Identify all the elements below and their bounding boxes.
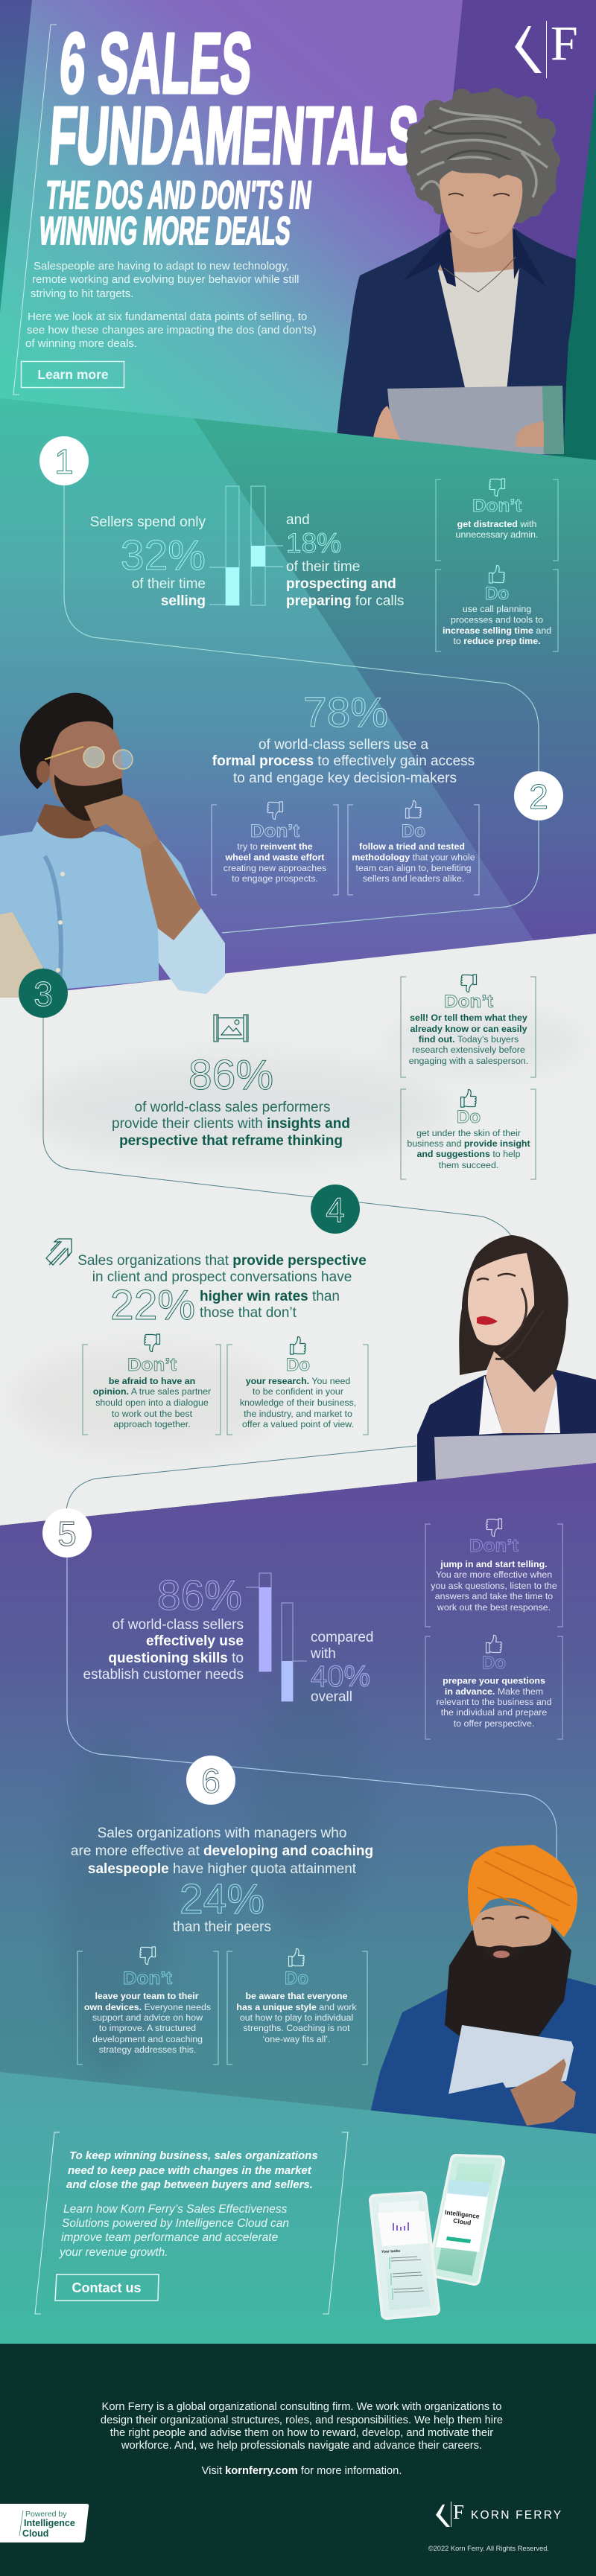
stat 5 right: overall — [311, 1689, 352, 1705]
panel: 4 do: Do — [286, 1355, 310, 1375]
panel: 1 don't: Don’t — [472, 496, 522, 516]
panel: 5 don't: You are more effective when — [436, 1569, 552, 1580]
call to action statement: need to keep pace with changes in the market — [68, 2164, 312, 2177]
icon: thumb up — [405, 800, 421, 818]
panel: 3 do — [401, 1089, 536, 1179]
stat 1 left: selling — [161, 593, 206, 609]
stat 5 left: of world-class sellers — [112, 1617, 244, 1633]
panel: 2 do: team can align to, benefiting — [356, 863, 472, 873]
stat 5 left — [83, 1572, 244, 1683]
panel: 2 do: follow a tried and tested — [359, 841, 465, 852]
phone: login screen: Intelligence — [445, 2208, 480, 2220]
stat 4: higher win rates than — [200, 1289, 340, 1304]
number 4: 4 — [326, 1190, 345, 1229]
panel: 6 don't: own devices. Everyone needs — [84, 2002, 211, 2012]
panel: 6 do: ‘one-way fits all’. — [263, 2034, 330, 2044]
panel: 4 don't: should open into a dialogue — [95, 1397, 209, 1408]
stat 5 left: establish customer needs — [83, 1667, 244, 1683]
panel: 6 do: strengths. Coaching is not — [243, 2023, 350, 2033]
call to action text: improve team performance and accelerate — [61, 2231, 279, 2244]
stat 3: 86% — [188, 1051, 273, 1099]
section background: call to action — [0, 2072, 596, 2344]
icon: thumb up — [489, 565, 504, 583]
panel: 3 do: Do — [457, 1107, 481, 1127]
panel: 3 do: and suggestions to help — [416, 1149, 521, 1159]
connector line 5-6 — [67, 1556, 557, 1861]
panel: 5 do: in advance. Make them — [445, 1686, 543, 1697]
intro text: remote working and evolving buyer behavior while still — [32, 273, 299, 286]
subtitle: WINNING MORE DEALS — [37, 209, 293, 253]
panel: 4 do: offer a valued point of view. — [242, 1419, 354, 1429]
stat 24%: 24% — [180, 1875, 264, 1923]
stat 5 right — [310, 1630, 374, 1705]
panel: 4 don't: opinion. A true sales partner — [93, 1386, 211, 1397]
title: 6 SALES — [57, 16, 255, 111]
section background: stats 1 and 2 — [0, 398, 596, 1001]
number 5 — [42, 1508, 92, 1558]
subtitle: THE DOS AND DON'TS IN — [44, 173, 314, 217]
panel: 6 don't — [77, 1947, 218, 2065]
stat 22%: 22% — [110, 1281, 195, 1329]
intro text: of winning more deals. — [25, 337, 137, 350]
hero frame bracket — [13, 25, 57, 395]
icon: thumb up — [460, 1089, 476, 1107]
stat 5 left: 86% — [157, 1572, 242, 1619]
call to action statement: To keep winning business, sales organizations — [69, 2149, 318, 2162]
stat 4: those that don’t — [200, 1305, 297, 1321]
icon: scroll with landscape — [214, 1015, 248, 1042]
panel: 6 don't: Don’t — [123, 1968, 172, 1989]
intro text — [25, 260, 317, 350]
photo: woman with laptop — [417, 1235, 596, 1482]
panel: 6 do: Do — [285, 1968, 308, 1989]
panel: 6 do — [227, 1948, 367, 2065]
intro text: Salespeople are having to adapt to new technology, — [34, 260, 289, 272]
phone: tasks screen: Your tasks — [381, 2249, 400, 2254]
stat 5 right: compared — [311, 1630, 374, 1645]
stat 2: 78% — [303, 689, 388, 736]
number 1: 1 — [54, 442, 74, 481]
icon: thumb up — [291, 1336, 305, 1354]
panel: 2 do: sellers and leaders alike. — [363, 873, 464, 884]
frame bracket — [35, 2132, 348, 2314]
panel: 2 don't: Don’t — [250, 821, 299, 841]
panel: 1 do: increase selling time and — [443, 625, 551, 636]
call to action statement: and close the gap between buyers and sellers. — [66, 2178, 313, 2191]
footer text: design their organizational structures, roles, and responsibilities. We help them hire — [101, 2414, 503, 2426]
panel: call to action — [35, 2132, 348, 2314]
panel: 5 do: to offer perspective. — [454, 1718, 534, 1729]
logo: Korn Ferry — [436, 2501, 562, 2527]
stat 1 right: prospecting and — [286, 576, 396, 592]
stat 1 right: and — [286, 512, 310, 528]
number 6 — [186, 1756, 235, 1805]
stat 6: salespeople have higher quota attainment — [88, 1861, 357, 1877]
section background: purple to teal — [0, 1463, 596, 2144]
panel: 3 do: get under the skin of their — [416, 1128, 521, 1138]
phones mockup — [375, 2160, 499, 2314]
panel: 4 do: to be confident in your — [253, 1386, 343, 1397]
panel: 4 do: the industry, and market to — [244, 1409, 352, 1419]
number 6: 6 — [201, 1762, 221, 1800]
logo: Korn Ferry: F — [453, 2501, 464, 2523]
panel: 5 don't: jump in and start telling. — [440, 1559, 548, 1569]
intro text: striving to hit targets. — [31, 287, 133, 300]
icon: thumb up — [289, 1948, 304, 1966]
panel: 2 don't — [212, 802, 338, 895]
footer text: Korn Ferry is a global organizational consulting firm. We work with organizations to — [102, 2401, 501, 2413]
call to action text: Solutions powered by Intelligence Cloud can — [62, 2217, 289, 2230]
stat 18%: 18% — [286, 528, 341, 558]
stat 2: formal process to effectively gain access — [212, 753, 475, 769]
stat 6: are more effective at developing and coaching — [71, 1843, 373, 1859]
logo: KF monogram: F — [551, 16, 578, 71]
panel: 1 don't — [436, 479, 558, 561]
number 3 — [19, 969, 68, 1018]
stat 32%: 32% — [121, 532, 206, 579]
footer background — [0, 2344, 596, 2576]
intro text: see how these changes are impacting the dos (and don’ts) — [27, 324, 317, 337]
panel: 5 don't: answers and take the time to — [435, 1591, 553, 1601]
logo: KF monogram — [515, 16, 578, 78]
panel: 1 do: Do — [485, 584, 509, 604]
stat 5 left: effectively use — [146, 1633, 244, 1649]
phone: login screen — [433, 2160, 499, 2280]
stat 1 left — [90, 514, 206, 609]
panel: 2 don't: wheel and waste effort — [225, 852, 324, 862]
logo: Korn Ferry: KORN FERRY — [471, 2509, 562, 2522]
icon: thumb down — [145, 1334, 159, 1352]
stat 1 right: preparing for calls — [286, 593, 404, 609]
panel: 6 do: out how to play to individual — [240, 2012, 353, 2023]
button: contact us — [55, 2274, 159, 2301]
number 5: 5 — [57, 1514, 77, 1553]
panel: 2 don't: creating new approaches — [224, 863, 326, 873]
panel: 1 do: use call planning — [463, 604, 531, 614]
panel: 5 do: Do — [482, 1653, 506, 1673]
panel: 3 don't — [401, 975, 536, 1077]
subtitle — [37, 173, 314, 253]
panel: 5 don't — [425, 1519, 562, 1627]
stat 6: than their peers — [173, 1919, 271, 1935]
panel: 6 don't: strategy addresses this. — [99, 2044, 196, 2055]
button: contact us: Contact us — [72, 2280, 142, 2295]
icon: thumb down — [461, 975, 477, 992]
footer text: the right people and advise them on how to reward, develop, and motivate their — [110, 2427, 493, 2439]
stat 3: of world-class sales performers — [135, 1100, 330, 1115]
panel: 1 don't: get distracted with — [457, 519, 536, 529]
panel: 3 don't: already know or can easily — [410, 1024, 527, 1034]
number 4 — [311, 1185, 360, 1234]
stat 1 left: Sellers spend only — [90, 514, 206, 530]
panel: 2 don't: to engage prospects. — [232, 873, 318, 884]
panel: 2 don't: try to reinvent the — [237, 841, 313, 852]
badge: powered by intelligence cloud — [0, 2504, 89, 2542]
panel: 5 do — [425, 1635, 562, 1739]
stat 3 — [112, 1051, 350, 1149]
stat 1 left: of their time — [132, 576, 206, 592]
panel: 4 do — [227, 1336, 368, 1435]
panel: 6 don't: to improve. A structured — [99, 2023, 196, 2033]
call to action text — [59, 2203, 289, 2259]
panel: 3 don't: find out. Today’s buyers — [419, 1034, 519, 1045]
panel: 1 don't: unnecessary admin. — [456, 529, 538, 540]
panel: 1 do: processes and tools to — [451, 615, 543, 625]
icon: thumb down — [267, 802, 283, 820]
copyright: ©2022 Korn Ferry. All Rights Reserved. — [428, 2545, 549, 2552]
stat 2: of world-class sellers use a — [259, 737, 428, 753]
photo: man with orange turban — [371, 1845, 596, 2144]
photo: woman with tablet — [336, 88, 576, 454]
bar chart: time split — [209, 486, 283, 605]
call to action text: Learn how Korn Ferry’s Sales Effectiveness — [63, 2203, 288, 2216]
panel: 3 do: business and provide insight — [407, 1138, 530, 1149]
hero background — [0, 0, 596, 491]
panel: 2 do: Do — [402, 821, 425, 841]
panel: 5 do: prepare your questions — [443, 1675, 545, 1686]
bar chart: questioning skills — [246, 1573, 307, 1701]
panel: 6 don't: development and coaching — [92, 2034, 203, 2044]
call to action text: your revenue growth. — [59, 2246, 168, 2259]
stat 5 left: questioning skills to — [108, 1651, 244, 1666]
title — [46, 16, 421, 181]
panel: 3 don't: Don’t — [444, 992, 493, 1012]
icon: growth arrows — [46, 1239, 72, 1265]
section background: concrete — [0, 934, 596, 1525]
call to action statement — [66, 2149, 318, 2191]
stat 3: perspective that reframe thinking — [119, 1133, 343, 1149]
number 2: 2 — [529, 777, 548, 816]
connector line 1-3 — [64, 484, 539, 933]
panel: 5 don't: you ask questions, listen to the — [431, 1581, 557, 1591]
stat 1 right — [286, 512, 404, 609]
photo: man with glasses — [0, 693, 225, 998]
panel: 3 don't: engaging with a salesperson. — [409, 1056, 528, 1066]
icon: thumb down — [486, 1519, 502, 1537]
stat 4: Sales organizations that provide perspective — [77, 1253, 367, 1269]
panel: 3 do: them succeed. — [439, 1160, 498, 1170]
panel: 4 do: your research. You need — [246, 1376, 350, 1386]
stat 40%: 40% — [311, 1660, 370, 1693]
panel: 6 do: be aware that everyone — [245, 1991, 348, 2001]
number 2 — [514, 771, 563, 820]
panel: 5 don't: Don’t — [469, 1536, 519, 1556]
connector line 3-5 — [43, 1017, 511, 1510]
icon: thumb down — [140, 1947, 155, 1965]
stat 5 right: with — [310, 1646, 336, 1662]
icon: thumb up — [486, 1635, 501, 1653]
panel: 6 do: has a unique style and work — [236, 2002, 357, 2012]
stat 2: to and engage key decision-makers — [233, 771, 457, 786]
panel: 1 do — [436, 565, 558, 651]
badge: powered by intelligence cloud: Intelligence — [24, 2518, 75, 2528]
panel: 2 do — [348, 800, 479, 895]
number 3: 3 — [34, 975, 53, 1013]
stat 2 — [212, 689, 475, 786]
button: learn more: Learn more — [37, 367, 109, 382]
panel: 4 don't: be afraid to have an — [109, 1376, 195, 1386]
panel: 5 do: the individual and prepare — [441, 1707, 547, 1718]
badge: powered by intelligence cloud: Powered by — [25, 2510, 67, 2519]
icon: thumb down — [489, 479, 505, 497]
stat 4 — [77, 1253, 367, 1329]
panel: 6 don't: support and advice on how — [92, 2012, 203, 2023]
panel: 3 don't: sell! Or tell them what they — [410, 1013, 527, 1023]
panel: 1 do: to reduce prep time. — [453, 636, 541, 646]
phone: login screen: Cloud — [453, 2217, 472, 2226]
panel: 5 don't: work out the best response. — [437, 1602, 551, 1613]
panel: 4 don't: to work out the best — [112, 1409, 193, 1419]
button: learn more — [21, 362, 124, 387]
stat 6: Sales organizations with managers who — [98, 1826, 346, 1841]
panel: 4 don't — [83, 1334, 221, 1435]
panel: 3 don't: research extensively before — [412, 1045, 525, 1055]
intro text: Here we look at six fundamental data points of selling, to — [28, 310, 307, 323]
panel: 4 don't: Don’t — [127, 1355, 177, 1375]
number 1 — [39, 436, 89, 485]
footer text: workforce. And, we help professionals navigate and advance their careers. — [121, 2440, 482, 2452]
stat 4: in client and prospect conversations have — [92, 1269, 352, 1285]
stat 3: provide their clients with insights and — [112, 1116, 350, 1132]
panel: 4 do: knowledge of their business, — [240, 1397, 356, 1408]
footer text — [101, 2401, 503, 2477]
panel: 2 do: methodology that your whole — [352, 852, 475, 862]
phone: tasks screen — [375, 2197, 434, 2314]
panel: 4 don't: approach together. — [113, 1419, 191, 1429]
badge: powered by intelligence cloud: Cloud — [22, 2528, 48, 2539]
stat 1 right: of their time — [286, 559, 360, 575]
panel: 5 do: relevant to the business and — [437, 1697, 552, 1707]
stat 6 — [71, 1826, 373, 1935]
panel: 6 don't: leave your team to their — [95, 1991, 199, 2001]
footer text: Visit kornferry.com for more information. — [202, 2465, 402, 2477]
